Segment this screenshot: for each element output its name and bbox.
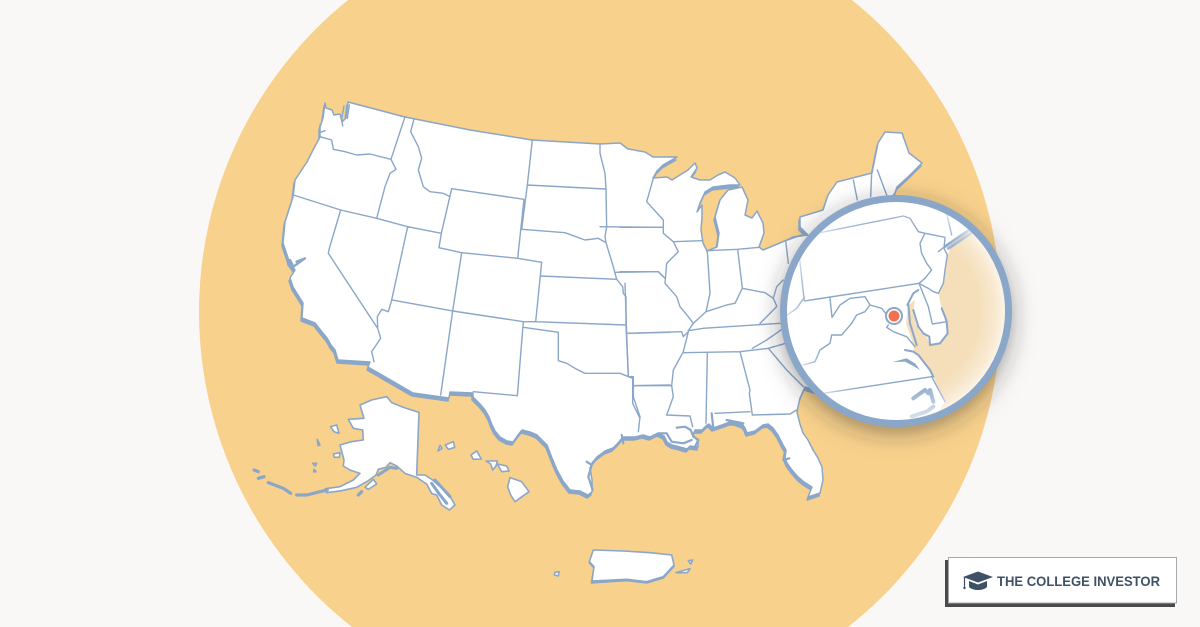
Aleutian islands [254, 470, 362, 495]
map: Alaska [254, 397, 455, 510]
lens ring [784, 198, 1008, 424]
icon: graduation cap [963, 572, 993, 590]
lens contents [787, 214, 1005, 419]
location marker [886, 308, 902, 324]
coast shadow [282, 105, 934, 500]
yellow background circle [199, 0, 1001, 627]
Kodiak island [365, 479, 377, 489]
Carolina sounds [912, 390, 933, 417]
lens shadow and white base [783, 198, 1009, 424]
ocean [906, 231, 1005, 412]
Bering sea islands [313, 425, 340, 472]
western state borders [290, 105, 670, 418]
land silhouette [283, 102, 935, 497]
Gulf coast detail [587, 413, 789, 490]
logo badge [945, 558, 1176, 607]
badge shadow [945, 560, 1175, 607]
Chesapeake inlet [892, 358, 920, 370]
magnifier lens: Mid-Atlantic close-up [783, 198, 1037, 443]
badge box [948, 558, 1176, 603]
logo wordmark: THE COLLEGE INVESTOR [997, 573, 1160, 589]
state borders in close-up [785, 213, 977, 402]
Alaska mainland [325, 397, 455, 510]
lens edge fade [787, 214, 1005, 419]
map: contiguous United States [282, 102, 935, 500]
map: Hawaii [438, 442, 529, 502]
Long Island bands [945, 229, 973, 248]
eastern state borders [620, 170, 887, 432]
map: Puerto Rico [554, 550, 693, 583]
